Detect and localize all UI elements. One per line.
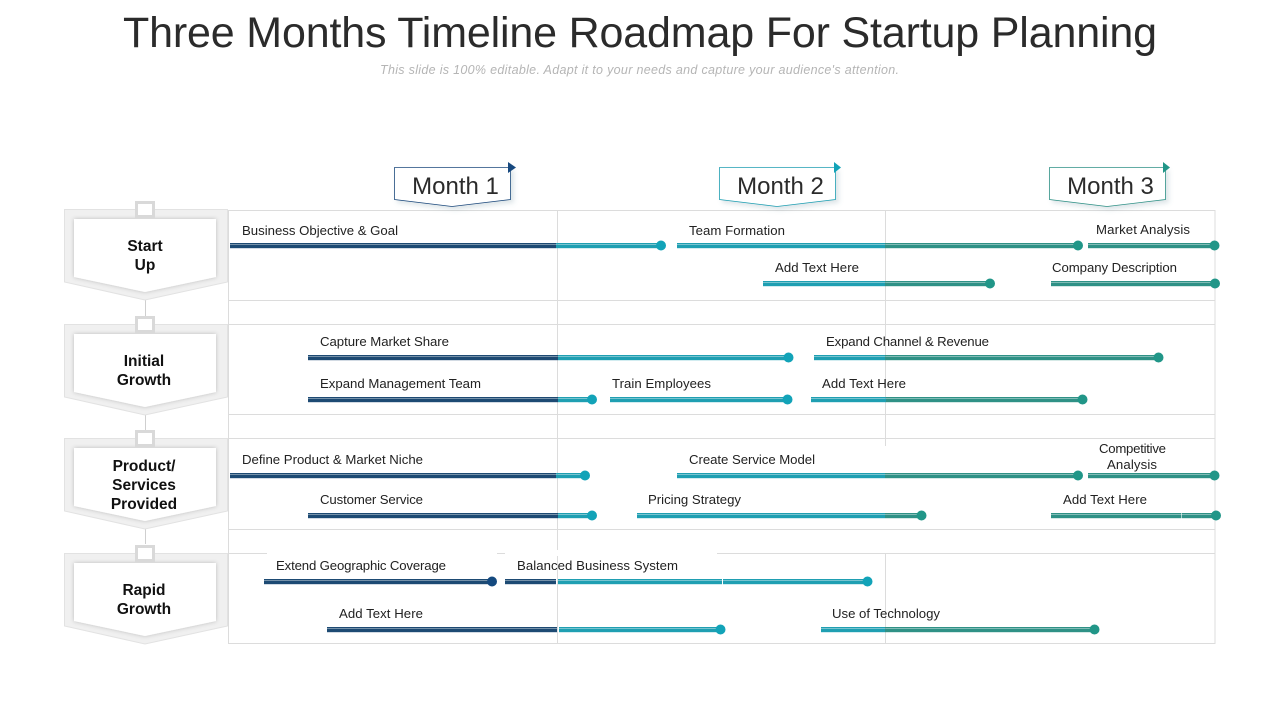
task: team formation	[677, 223, 1083, 250]
task: competitive analysis: Competitive	[1099, 441, 1166, 456]
task: add text here (row 4)	[327, 606, 726, 634]
task: customer service	[308, 492, 597, 520]
task: expand management team	[308, 376, 597, 404]
month 1 tag: Month 1	[412, 173, 499, 200]
task: capture market share	[308, 334, 794, 362]
task: train employees: Train Employees	[612, 376, 711, 391]
task: customer service: Customer Service	[320, 492, 423, 507]
phase: start up: Up	[135, 257, 155, 274]
month 1 tag	[394, 162, 516, 206]
task: pricing strategy	[637, 492, 926, 520]
phase: rapid growth: Growth	[117, 601, 171, 618]
task: business objective & goal	[230, 223, 666, 250]
task: business objective & goal: Business Objective & Goal	[242, 223, 398, 238]
task: balanced business system: Balanced Business System	[517, 558, 678, 573]
task: train employees	[610, 376, 792, 404]
phase: rapid growth	[64, 546, 228, 644]
phase: initial growth: Growth	[117, 372, 171, 389]
task: expand channel & revenue: Expand Channel & Revenue	[826, 334, 989, 349]
phase: initial growth: Initial	[124, 353, 164, 370]
task: company description	[1051, 260, 1220, 288]
month 3 tag	[1050, 162, 1170, 206]
phase: start up: Start	[127, 238, 163, 255]
task: define product & market niche: Define Product & Market Niche	[242, 452, 423, 467]
task: define product & market niche	[230, 452, 590, 480]
task: create service model: Create Service Model	[689, 452, 815, 467]
phase: product/services provided: Services	[112, 477, 176, 494]
task: extend geographic coverage	[264, 558, 497, 586]
task: add text here (row 4): Add Text Here	[339, 606, 423, 621]
phase: start up	[64, 202, 228, 300]
task: add text here (row 1)	[763, 260, 995, 288]
subtitle: This slide is 100% editable. Adapt it to your needs and capture your audience's attention.	[380, 63, 899, 77]
task: add text here (row 3): Add Text Here	[1063, 492, 1147, 507]
task: create service model	[677, 452, 1083, 480]
task: use of technology: Use of Technology	[832, 606, 940, 621]
phase: product/services provided	[64, 432, 228, 529]
task: competitive analysis	[1088, 441, 1220, 480]
task: use of technology	[821, 606, 1100, 634]
month 2 tag	[720, 162, 841, 206]
title: Three Months Timeline Roadmap For Startup Planning	[123, 9, 1157, 57]
phase: product/services provided: Product/	[113, 458, 176, 475]
task: add text here (row 1): Add Text Here	[775, 260, 859, 275]
task: extend geographic coverage: Extend Geographic Coverage	[276, 558, 446, 573]
task: competitive analysis: Analysis	[1107, 457, 1157, 472]
task: pricing strategy: Pricing Strategy	[648, 492, 741, 507]
task: expand channel & revenue	[814, 334, 1164, 362]
task: expand management team: Expand Management Team	[320, 376, 481, 391]
task: company description: Company Description	[1052, 260, 1177, 275]
task: add text here (row 2)	[811, 376, 1088, 404]
task: team formation: Team Formation	[689, 223, 785, 238]
task: add text here (row 2): Add Text Here	[822, 376, 906, 391]
task: market analysis: Market Analysis	[1096, 222, 1190, 237]
phase: initial growth	[64, 318, 228, 415]
phase: product/services provided: Provided	[111, 496, 177, 513]
task: add text here (row 3)	[1051, 492, 1221, 520]
phase: rapid growth: Rapid	[122, 582, 166, 599]
month 2 tag: Month 2	[737, 173, 824, 200]
month 3 tag: Month 3	[1067, 173, 1154, 200]
task: balanced business system	[505, 558, 872, 586]
task: capture market share: Capture Market Share	[320, 334, 449, 349]
task: market analysis	[1088, 222, 1220, 250]
